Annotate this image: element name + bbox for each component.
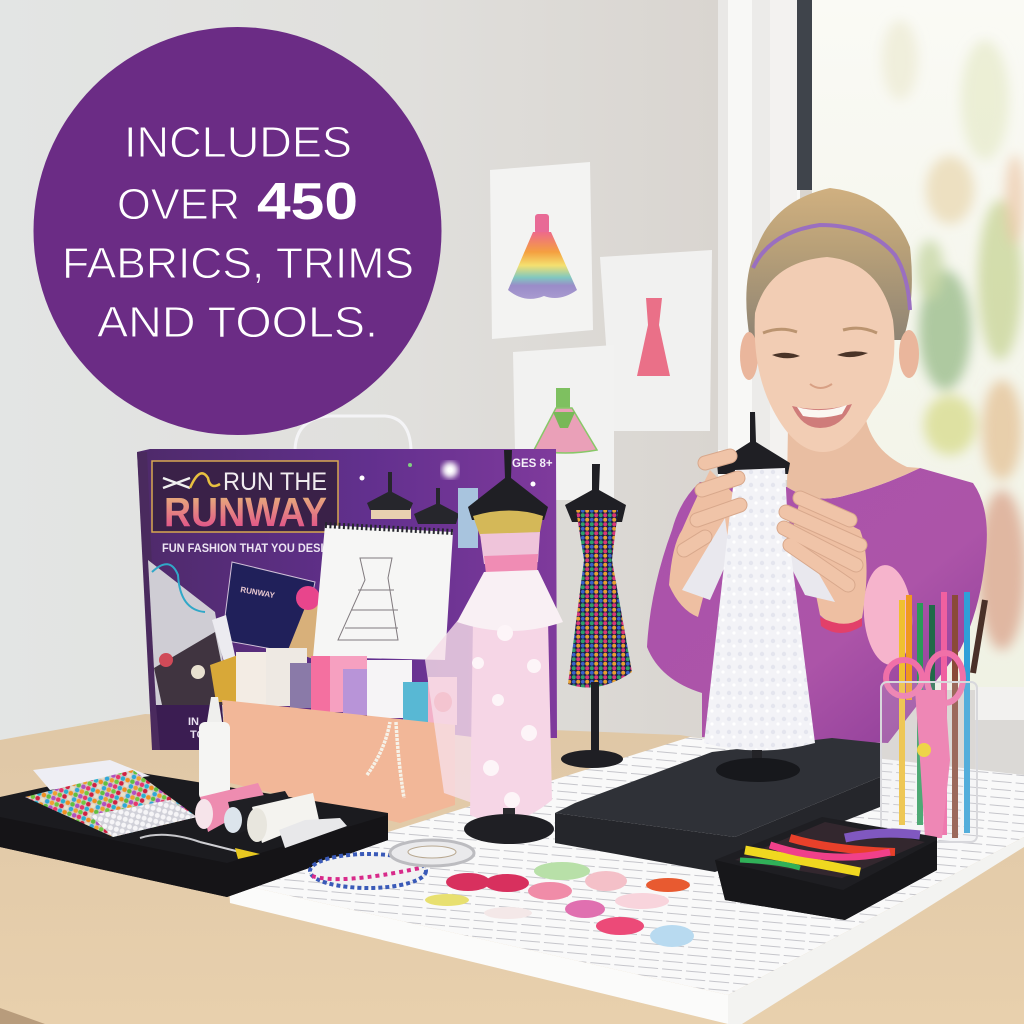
fabric rolls in basket — [210, 648, 457, 725]
drawing: pink dress — [600, 250, 712, 431]
girl — [647, 188, 987, 743]
window — [718, 0, 1024, 778]
purple circle callout — [34, 27, 442, 435]
pink dress on mannequin — [425, 450, 563, 844]
callout text — [62, 118, 414, 347]
lined white board — [229, 737, 1024, 1024]
black gem tray — [0, 760, 388, 897]
girl hair — [746, 188, 912, 340]
peach basket — [222, 700, 455, 823]
box logo — [152, 461, 338, 535]
drawing: green dress — [513, 345, 614, 500]
callout text: AND TOOLS. — [97, 298, 378, 347]
bracelet — [820, 617, 862, 633]
callout text: FABRICS, TRIMS — [62, 239, 414, 288]
sticker patches — [425, 862, 694, 947]
girl ears — [740, 332, 758, 380]
hairband — [753, 225, 910, 310]
callout text: OVER — [117, 180, 240, 229]
right wrist and palm — [790, 500, 867, 626]
pencil cup with scissors — [881, 592, 985, 842]
pompom pincushion — [861, 563, 915, 667]
product box: RUNWAY — [240, 585, 276, 600]
ages label: GES 8+ — [512, 458, 553, 470]
left wrist and palm — [669, 470, 740, 617]
girl torso and sleeves — [647, 468, 987, 743]
callout text: 450 — [257, 173, 358, 231]
sequin dress on mannequin — [561, 464, 632, 768]
girl neck — [787, 420, 920, 499]
product box: IN — [188, 716, 199, 728]
box tagline: FUN FASHION THAT YOU DESIGN — [162, 541, 340, 555]
floss tray — [715, 817, 937, 920]
girl face — [755, 257, 894, 452]
nose and smile — [810, 384, 832, 388]
box illustrations — [148, 560, 230, 705]
box logo: RUNWAY — [164, 489, 327, 535]
white glue bottle — [199, 697, 230, 800]
black display base — [555, 738, 880, 872]
table — [0, 714, 1024, 1024]
product box: TO — [190, 729, 206, 741]
foliage — [882, 20, 1024, 650]
callout text: INCLUDES — [124, 118, 352, 167]
pin ring and ribbon — [310, 840, 474, 888]
eyes and brows — [772, 353, 800, 358]
sketchbook — [288, 525, 453, 660]
product box — [137, 416, 557, 750]
drawing pages on the wall — [490, 162, 712, 500]
box stars — [360, 462, 536, 486]
thread spools — [195, 783, 347, 848]
small mannequins on box — [367, 472, 478, 548]
drawing: rainbow gown — [490, 162, 593, 339]
white lace dress on mannequin — [682, 412, 835, 782]
box logo: RUN THE — [223, 468, 327, 496]
fingers holding the dress — [684, 456, 860, 585]
